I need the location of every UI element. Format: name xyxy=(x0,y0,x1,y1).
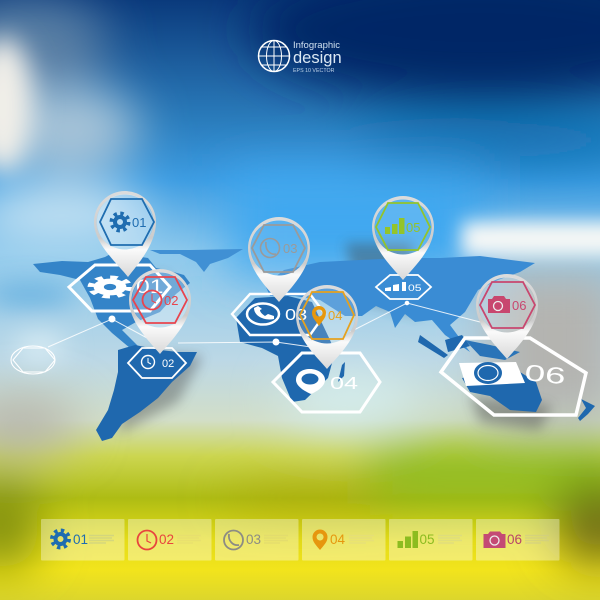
legend card 01 xyxy=(41,519,124,560)
logo: infographic design: design xyxy=(293,49,342,67)
map hexagon 02: 02 xyxy=(162,358,174,370)
map hexagon 02 xyxy=(128,348,186,378)
south america xyxy=(96,345,197,441)
logo: infographic design: Infographic xyxy=(293,40,340,51)
icon: gear xyxy=(112,214,128,230)
hexagon 01 xyxy=(100,199,154,245)
logo: infographic design xyxy=(258,40,342,74)
new zealand xyxy=(578,399,595,421)
pin 04 xyxy=(296,285,358,369)
legend card 04 xyxy=(302,519,386,560)
map hexagon 04: 04 xyxy=(330,373,358,393)
map hexagon 05 xyxy=(376,275,431,299)
map hexagon 05: 05 xyxy=(408,283,422,294)
legend card 05: 05 xyxy=(420,532,435,547)
icon: camera xyxy=(488,296,510,313)
legend card 06: 06 xyxy=(507,532,522,547)
pin 03 xyxy=(248,217,310,302)
legend card 03 xyxy=(215,519,298,560)
legend card 02: 02 xyxy=(159,532,174,547)
logo: infographic design: EPS 10 VECTOR xyxy=(293,68,335,74)
legend card 01: 01 xyxy=(73,532,88,547)
pin 06: 06 xyxy=(512,298,526,313)
hexagon 05 xyxy=(376,203,430,250)
north america and greenland xyxy=(33,251,190,348)
map hexagon 06: 06 xyxy=(523,359,567,389)
legend card 03: 03 xyxy=(246,532,261,547)
hexagon 03 xyxy=(252,225,305,272)
legend card 05 xyxy=(389,519,472,560)
map hexagon 03 xyxy=(232,294,325,335)
pin 06 xyxy=(476,274,538,359)
icon: location marker xyxy=(312,306,326,326)
map hexagon 01 xyxy=(69,265,170,311)
pin 01: 01 xyxy=(132,215,146,230)
eurasia xyxy=(265,256,535,352)
legend card 06 xyxy=(476,519,560,560)
pin 02: 02 xyxy=(164,293,178,308)
map hexagon 04 xyxy=(273,353,380,412)
icon: phone xyxy=(260,238,280,258)
pin 02 xyxy=(129,269,191,354)
icon: bar signal xyxy=(385,218,404,234)
icon: clock xyxy=(142,290,162,310)
legend card 02 xyxy=(128,519,212,560)
map hexagon 01: 01 xyxy=(136,276,163,297)
pin 01 xyxy=(94,191,156,277)
pin 05: 05 xyxy=(406,220,420,235)
outlined empty hexagon xyxy=(11,346,55,374)
legend bar xyxy=(41,519,560,560)
map shadow xyxy=(100,243,552,434)
connector lines xyxy=(48,301,480,349)
pin 05 xyxy=(372,196,434,280)
pin 03: 03 xyxy=(283,241,297,256)
icon: globe xyxy=(258,40,290,72)
hexagon 04 xyxy=(300,292,354,339)
world map xyxy=(33,243,595,441)
map hexagon 03: 03 xyxy=(285,306,307,324)
australia xyxy=(462,372,542,412)
madagascar xyxy=(338,362,345,382)
hexagon 06 xyxy=(480,282,535,328)
pin 04: 04 xyxy=(328,308,342,323)
hexagon 02 xyxy=(133,277,187,323)
legend card 04: 04 xyxy=(330,532,346,547)
map hexagon 06 xyxy=(441,338,586,415)
africa xyxy=(236,296,335,402)
